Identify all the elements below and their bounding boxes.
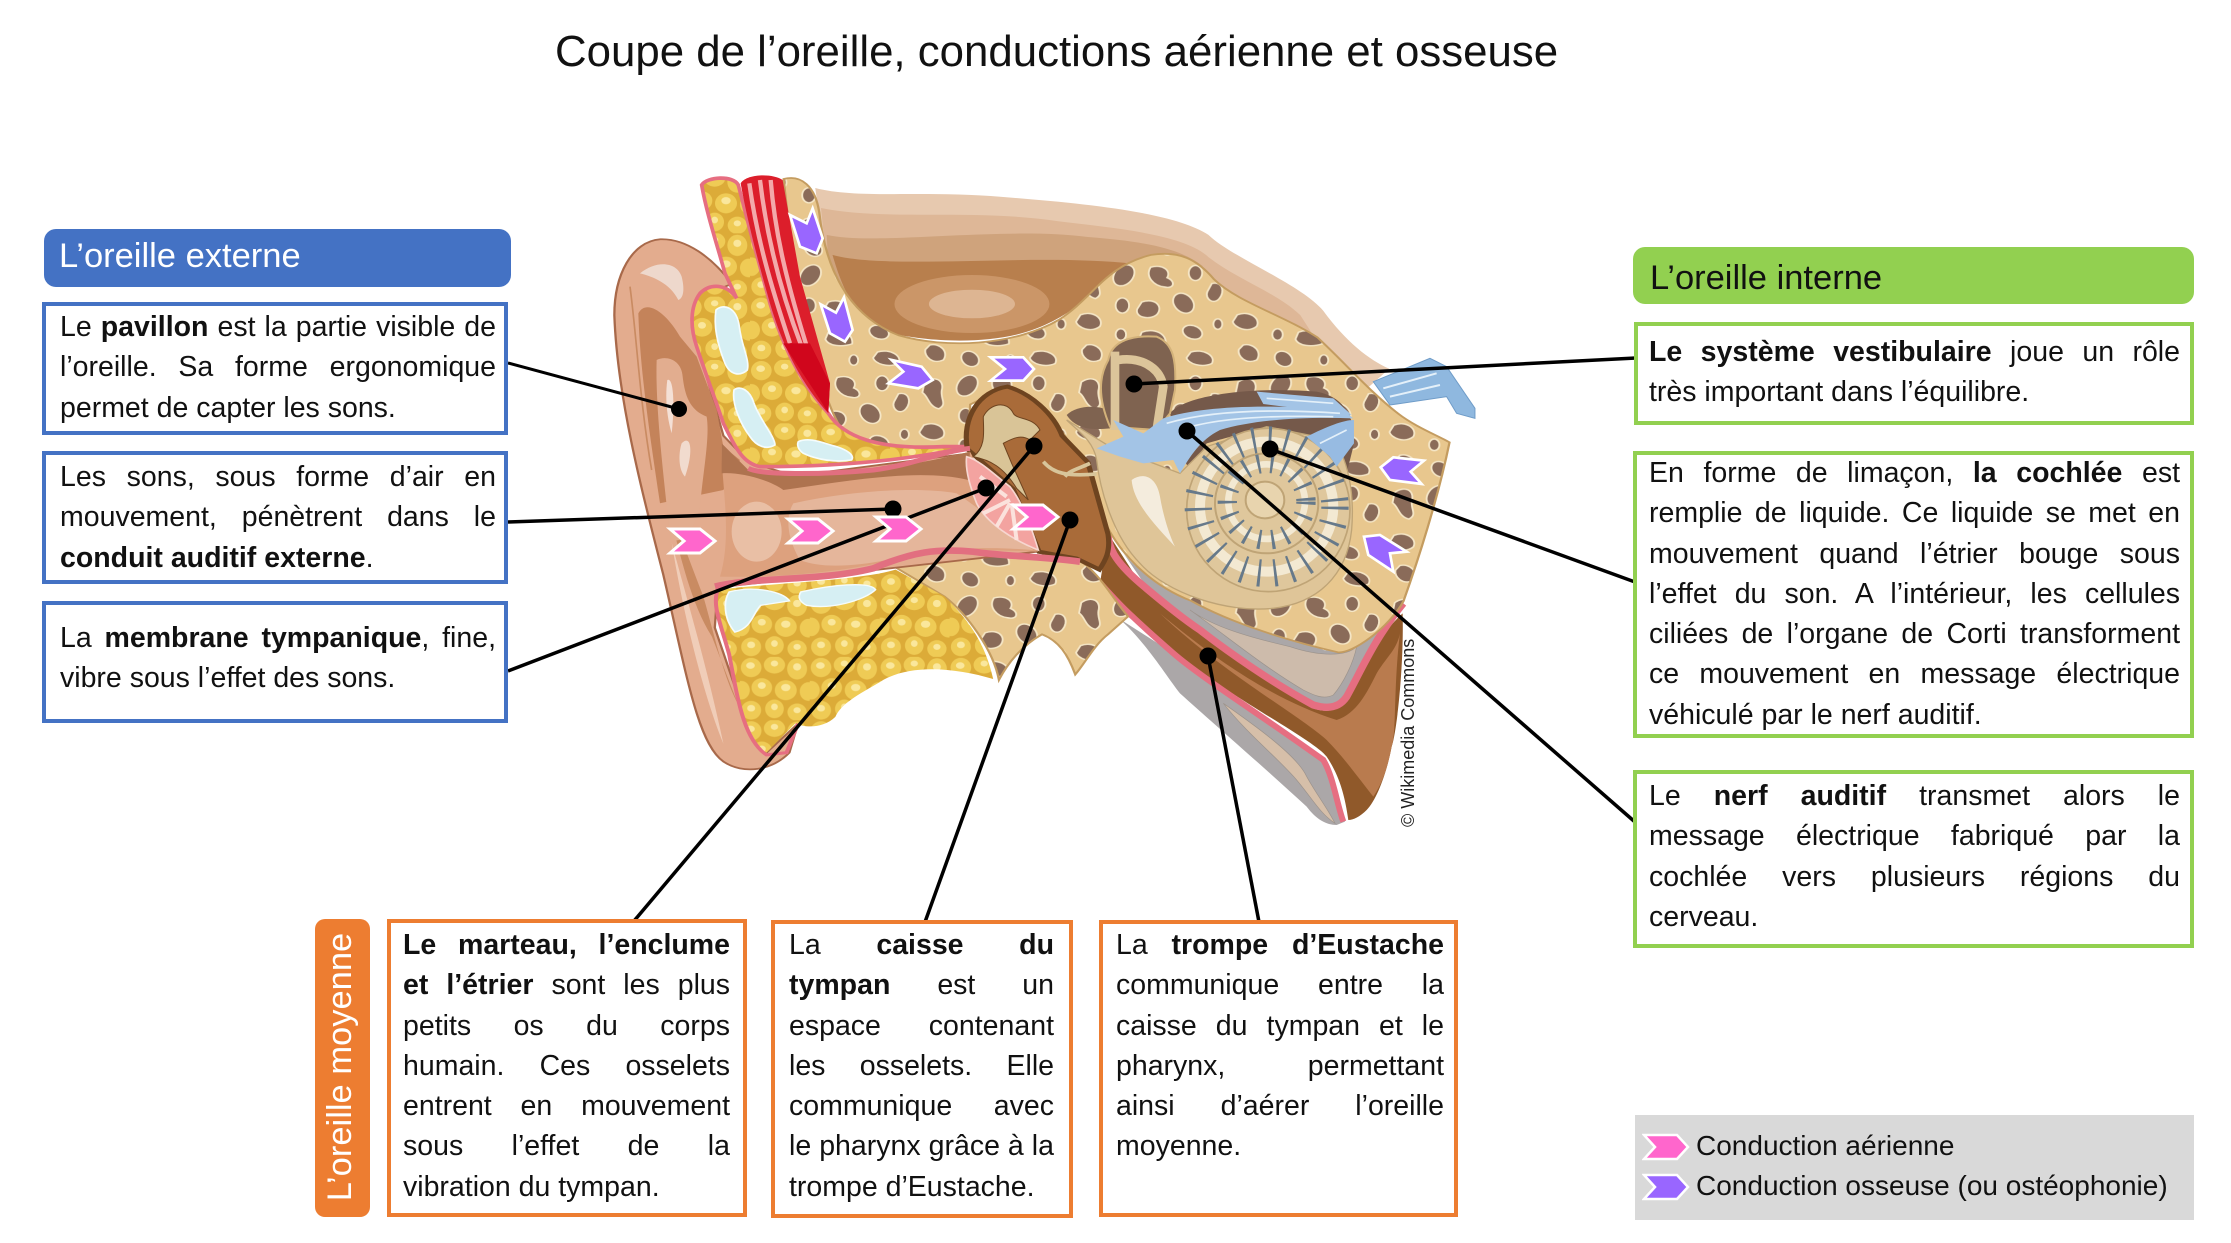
credit: © Wikimedia Commons bbox=[1398, 639, 1418, 827]
cochlear shell bbox=[1067, 420, 1352, 609]
text: pavillon: l’oreille. Sa forme ergonomique bbox=[60, 351, 496, 383]
pink conduction arrows bbox=[670, 505, 1058, 553]
callout: nerf line bbox=[1178, 422, 1635, 822]
text: vestibulaire: Le système vestibulaire joue un rôle bbox=[1649, 336, 2180, 368]
pink tube walls bbox=[1108, 533, 1403, 707]
text: pavillon: Le pavillon est la partie visible de bbox=[60, 311, 496, 343]
canal walls bbox=[748, 448, 970, 474]
text: cochlée: mouvement quand l’étrier bouge sous bbox=[1649, 538, 2180, 570]
anatomy: lower fat and tympanic cavity bbox=[716, 387, 1109, 755]
auditory nerve bbox=[1097, 358, 1475, 473]
text: membrane bbox=[42, 601, 508, 723]
stapes bbox=[1043, 462, 1097, 477]
text: vestibulaire bbox=[1634, 322, 2194, 425]
text: trompe: communique entre la bbox=[1116, 969, 1444, 1001]
text: cochlée bbox=[1633, 451, 2194, 738]
text: caisse du tympan: le pharynx grâce à la bbox=[789, 1130, 1054, 1162]
text: cochlée: l’effet du son. A l’intérieur, les cellules bbox=[1649, 578, 2180, 610]
anatomy: inner ear bbox=[1043, 336, 1475, 609]
anatomy: skull, bone and pinna bbox=[614, 178, 1450, 769]
legend bbox=[1635, 1115, 2194, 1220]
text: nerf auditif: Le nerf auditif transmet alors le bbox=[1649, 780, 2180, 812]
legend item: bone: Conduction osseuse (ou ostéophonie) bbox=[1696, 1170, 2168, 1201]
text: caisse du tympan: La caisse du bbox=[789, 929, 1054, 961]
text: osselets: et l’étrier sont les plus bbox=[403, 969, 730, 1001]
text: osselets: petits os du corps bbox=[403, 1010, 730, 1042]
text: cochlée: véhiculé par le nerf auditif. bbox=[1649, 699, 1982, 731]
pinna shading bbox=[630, 264, 740, 540]
text: trompe: ainsi d’aérer l’oreille bbox=[1116, 1090, 1444, 1122]
text: cochlée: ciliées de l’organe de Corti transforment bbox=[1649, 618, 2180, 650]
scalp tissue layers bbox=[815, 188, 1389, 387]
cavity behind nerves bbox=[1170, 390, 1354, 473]
text: trompe: pharynx, permettant bbox=[1116, 1050, 1444, 1082]
text: caisse du tympan: tympan est un bbox=[789, 969, 1054, 1001]
anatomy: lower tissue and Eustachian tube bbox=[1076, 533, 1403, 825]
text: osselets bbox=[387, 919, 747, 1217]
purple conduction arrows, right bbox=[1364, 457, 1424, 572]
temporal bone, lower bbox=[896, 554, 1128, 680]
temporal bone, upper bbox=[784, 178, 1450, 652]
legend item: air: Conduction aérienne bbox=[1696, 1130, 1954, 1161]
heading: oreille interne: L’oreille interne bbox=[1650, 259, 1882, 297]
text: pavillon bbox=[42, 302, 508, 435]
heading: oreille moyenne bbox=[315, 919, 370, 1217]
text: caisse du tympan: espace contenant bbox=[789, 1010, 1054, 1042]
heading: oreille interne bbox=[1633, 247, 2194, 304]
text: caisse du tympan: les osselets. Elle bbox=[789, 1050, 1054, 1082]
text: nerf auditif: cerveau. bbox=[1649, 901, 1758, 933]
text: osselets: humain. Ces osselets bbox=[403, 1050, 730, 1082]
text: conduit auditif: mouvement, pénètrent dans le bbox=[60, 501, 496, 533]
text: osselets: sous l’effet de la bbox=[403, 1130, 730, 1162]
tympanic cavity bbox=[966, 387, 1109, 570]
text: pavillon: permet de capter les sons. bbox=[60, 392, 396, 424]
fat, upper bbox=[692, 178, 970, 467]
heading: oreille moyenne: L’oreille moyenne bbox=[321, 933, 359, 1201]
callout: caisse line bbox=[925, 512, 1078, 922]
text: nerf auditif: message électrique fabriqué par la bbox=[1649, 820, 2180, 852]
heading: oreille externe: L’oreille externe bbox=[59, 237, 301, 275]
pinna folds, lower bbox=[657, 462, 738, 744]
pinna bbox=[614, 239, 1036, 769]
grey layers under cochlea bbox=[1117, 543, 1403, 706]
text: cochlée: ce mouvement en message électrique bbox=[1649, 658, 2180, 690]
text: cochlée: remplie de liquide. Ce liquide se met en bbox=[1649, 497, 2180, 529]
purple conduction arrows, upper bbox=[790, 208, 1034, 388]
pink skin line, lower bbox=[716, 590, 798, 755]
text: trompe: La trompe d’Eustache bbox=[1116, 929, 1444, 961]
text: membrane: La membrane tympanique, fine, bbox=[60, 622, 496, 654]
text: osselets: entrent en mouvement bbox=[403, 1090, 730, 1122]
text: trompe bbox=[1099, 920, 1458, 1217]
callout: conduit line bbox=[508, 500, 902, 522]
text: caisse du tympan bbox=[771, 920, 1073, 1218]
anatomy: upper pinna, fat and muscle bbox=[630, 175, 970, 540]
fat, lower bbox=[716, 570, 993, 753]
text: conduit auditif: Les sons, sous forme d’air en bbox=[60, 461, 496, 493]
cartilage patches, upper bbox=[715, 307, 852, 461]
grey layers below tube bbox=[1120, 619, 1345, 825]
text: caisse du tympan: trompe d’Eustache. bbox=[789, 1171, 1035, 1203]
heading: oreille externe bbox=[44, 229, 511, 287]
text: nerf auditif: cochlée vers plusieurs régions du bbox=[1649, 861, 2180, 893]
callout: marteau line bbox=[634, 438, 1042, 921]
text: nerf auditif bbox=[1633, 770, 2194, 948]
text: osselets: vibration du tympan. bbox=[403, 1171, 660, 1203]
text: osselets: Le marteau, l’enclume bbox=[403, 929, 730, 961]
vestibule bbox=[1067, 336, 1175, 430]
callout: cochlée line bbox=[1262, 440, 1635, 582]
callout: vestibule line bbox=[1126, 358, 1636, 392]
text: cochlée: En forme de limaçon, la cochlée est bbox=[1649, 457, 2180, 489]
text: conduit auditif bbox=[42, 451, 508, 584]
callout: membrane line bbox=[508, 480, 994, 671]
cochlear spiral bbox=[1187, 428, 1350, 592]
text: caisse du tympan: communique avec bbox=[789, 1090, 1054, 1122]
callout: trompe line bbox=[1200, 648, 1259, 922]
anatomy: ear canal and ossicles bbox=[715, 405, 1080, 587]
eardrum bbox=[966, 457, 1038, 550]
canal bbox=[720, 443, 1038, 577]
callout: pavillon line bbox=[508, 363, 687, 417]
title: Coupe de l’oreille, conductions aérienne et osseuse bbox=[555, 27, 1558, 76]
text: vestibulaire: très important dans l’équilibre. bbox=[1649, 376, 2029, 408]
text: trompe: caisse du tympan et le bbox=[1116, 1010, 1444, 1042]
brown tube bbox=[1100, 533, 1403, 820]
text: conduit auditif: conduit auditif externe. bbox=[60, 542, 374, 574]
muscle bbox=[741, 175, 830, 413]
cartilage patches, lower bbox=[725, 585, 876, 632]
text: trompe: moyenne. bbox=[1116, 1130, 1241, 1162]
ossicles bbox=[973, 405, 1040, 500]
text: membrane: vibre sous l’effet des sons. bbox=[60, 662, 395, 694]
